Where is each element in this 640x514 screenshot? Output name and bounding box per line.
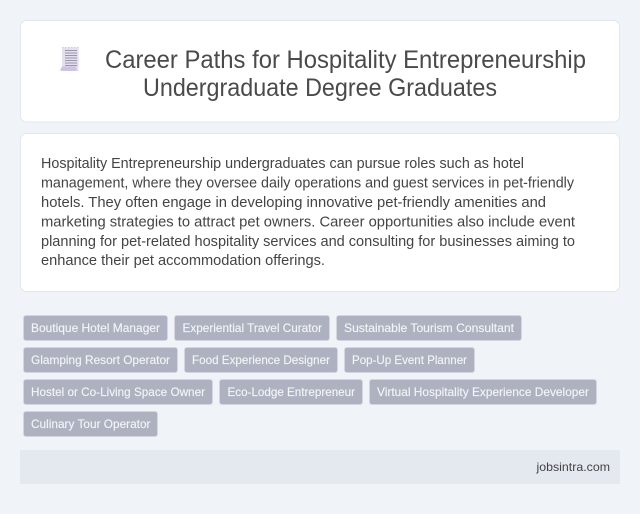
tag: Virtual Hospitality Experience Developer [370, 380, 596, 404]
icon: document scroll [60, 48, 79, 71]
title: Career Paths for Hospitality Entrepreneurship [105, 46, 586, 74]
tag: Sustainable Tourism Consultant: Sustainable Tourism Consultant [344, 321, 515, 335]
tag: Culinary Tour Operator: Culinary Tour Operator [31, 417, 150, 431]
tag: Eco-Lodge Entrepreneur: Eco-Lodge Entrepreneur [228, 385, 355, 399]
description text: enhance their pet accommodation offerings. [41, 253, 325, 269]
tag: Hostel or Co-Living Space Owner [24, 380, 212, 404]
tag: Experiential Travel Curator [174, 316, 330, 340]
description text: Hospitality Entrepreneurship undergraduates can pursue roles such as hotel [41, 156, 524, 172]
description text: management, where they oversee daily operations and guest services in pet-friendly [41, 176, 575, 192]
tag: Culinary Tour Operator [24, 412, 158, 436]
description text: marketing strategies to attract pet owners. Career opportunities also include event [41, 214, 575, 230]
title [105, 46, 586, 102]
tag: Eco-Lodge Entrepreneur [220, 380, 362, 404]
description text: planning for pet-related hospitality services and consulting for businesses aiming to [41, 234, 575, 250]
tag: Sustainable Tourism Consultant [336, 316, 522, 340]
career tags [24, 316, 596, 436]
tag: Glamping Resort Operator [24, 348, 178, 372]
title: Undergraduate Degree Graduates [143, 74, 497, 102]
tag: Food Experience Designer: Food Experience Designer [192, 353, 330, 367]
tag: Boutique Hotel Manager [24, 316, 168, 340]
tag: Boutique Hotel Manager: Boutique Hotel Manager [31, 321, 160, 335]
tag: Pop-Up Event Planner [344, 348, 474, 372]
description text [41, 156, 575, 269]
tag: Experiential Travel Curator: Experiential Travel Curator [182, 321, 322, 335]
description text: hotels. They often engage in developing innovative pet-friendly amenities and [41, 195, 546, 211]
header panel [20, 20, 620, 122]
tag: Pop-Up Event Planner: Pop-Up Event Planner [352, 353, 467, 367]
tag: Virtual Hospitality Experience Developer: Virtual Hospitality Experience Developer [377, 385, 589, 399]
tag: Glamping Resort Operator: Glamping Resort Operator [31, 353, 170, 367]
description panel [20, 134, 620, 292]
tag: Hostel or Co-Living Space Owner: Hostel or Co-Living Space Owner [31, 385, 205, 399]
footer source text: jobsintra.com [535, 460, 610, 474]
footer bar [20, 450, 620, 484]
tag: Food Experience Designer [184, 348, 338, 372]
